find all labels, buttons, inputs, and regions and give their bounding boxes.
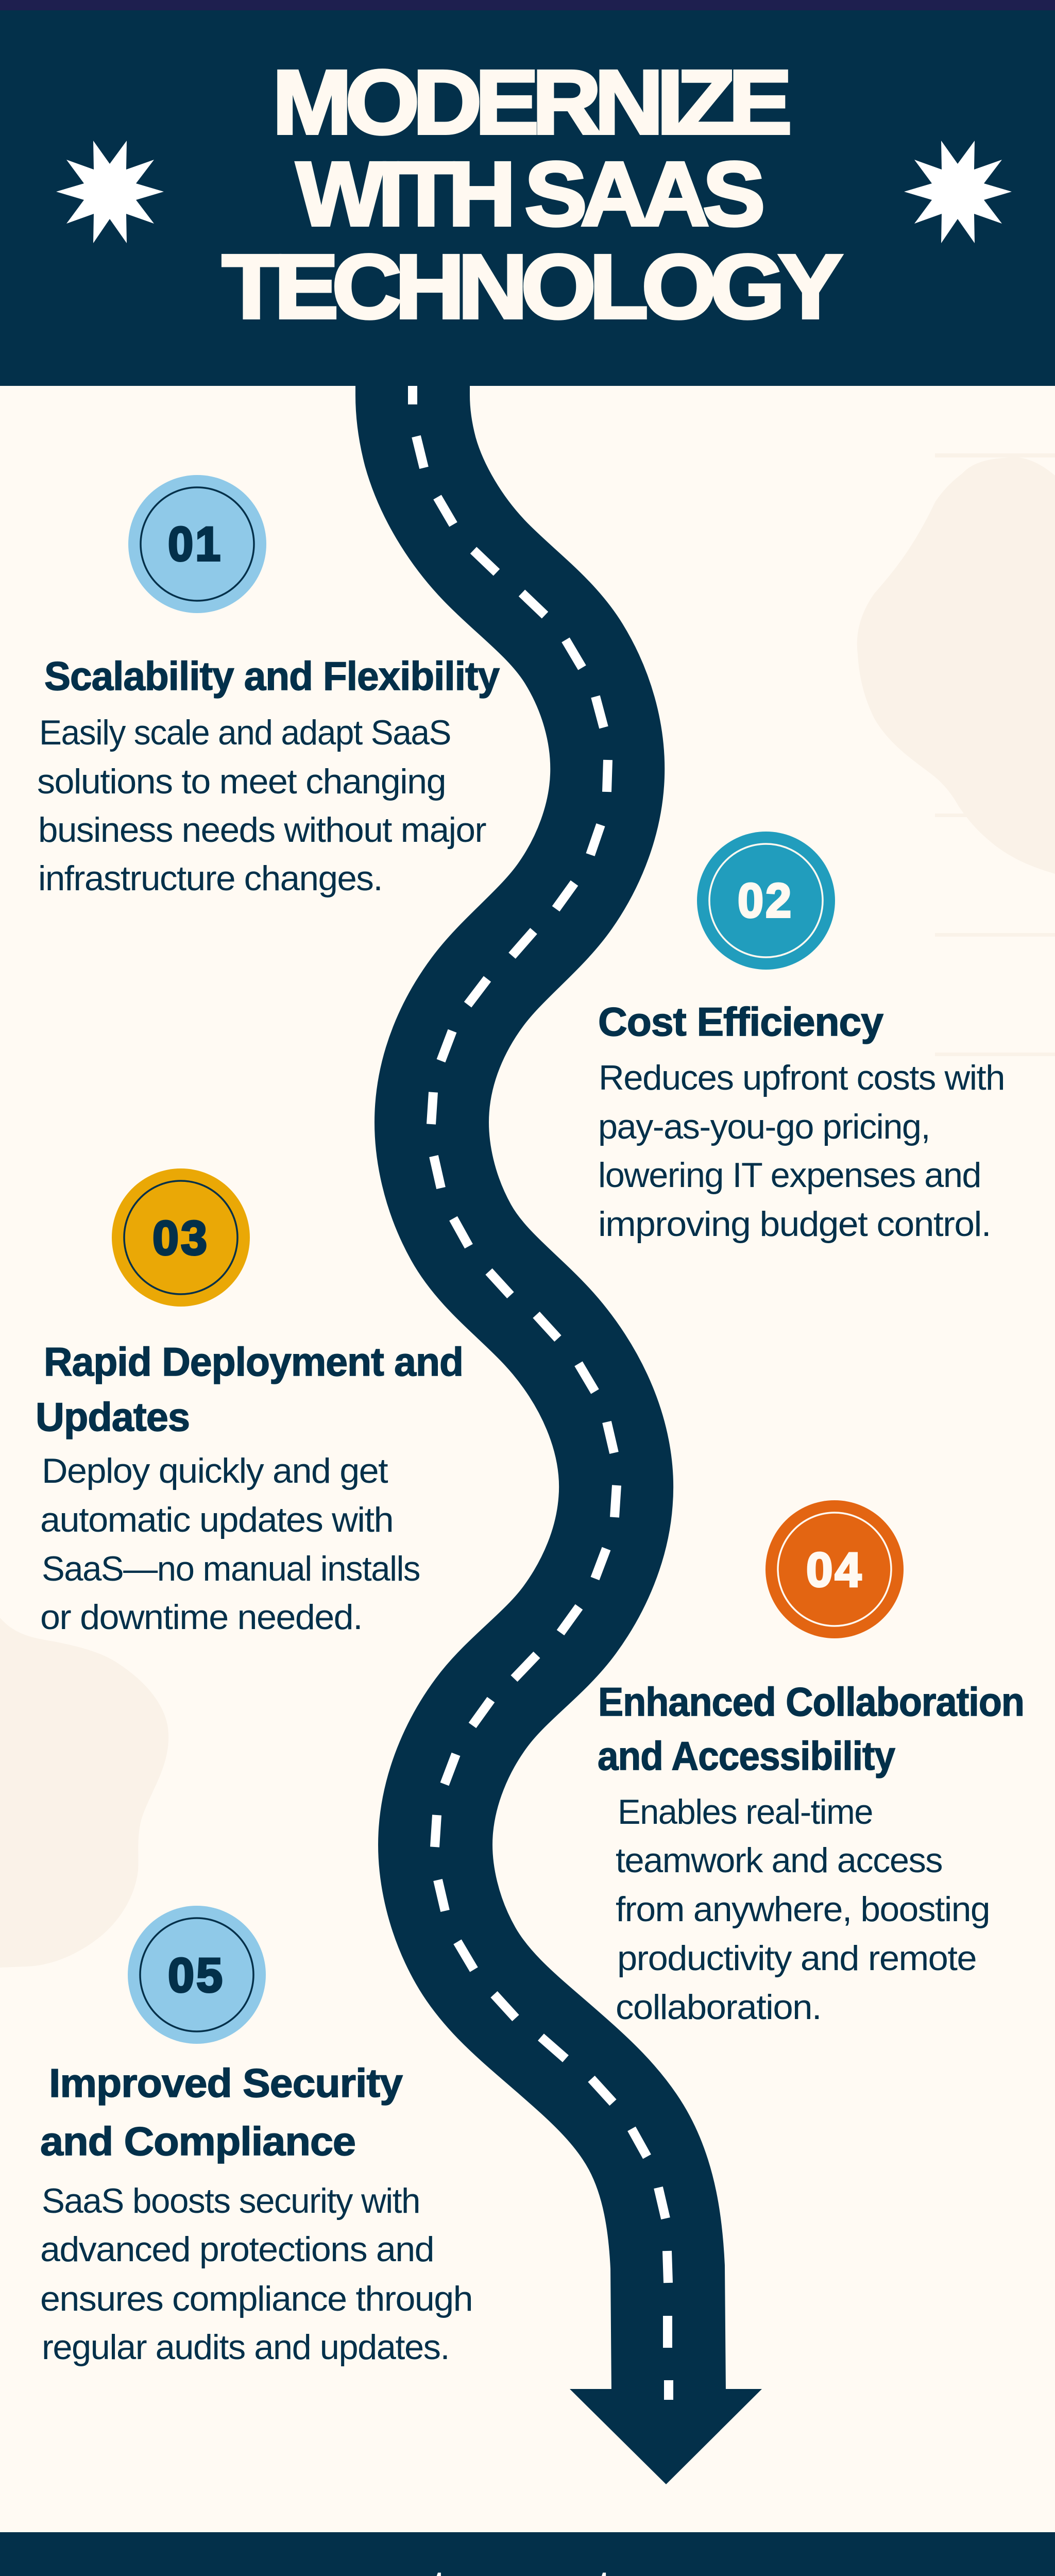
panel: 04 collaboration	[598, 1500, 1024, 2027]
heading 04: and Accessibility	[598, 1733, 895, 1778]
road arrowhead	[570, 2389, 762, 2484]
body text 03: automatic updates with	[40, 1500, 393, 1539]
title: TECHNOLOGY	[222, 236, 841, 337]
badge 04: 04	[806, 1543, 863, 1597]
title: WITH SAAS	[296, 144, 762, 245]
body text 04	[616, 1792, 990, 2027]
body text 02: improving budget control.	[598, 1205, 991, 1244]
body text 03: or downtime needed.	[40, 1598, 362, 1637]
heading 05	[40, 2060, 403, 2164]
body text 01: business needs without major	[38, 810, 486, 850]
body text 05: advanced protections and	[40, 2230, 434, 2269]
body text 02	[598, 1058, 1005, 1244]
heading 04	[598, 1679, 1024, 1778]
badge 05	[128, 1906, 266, 2044]
winding road	[413, 361, 669, 2393]
panel: 05 security	[40, 1906, 472, 2367]
heading 05: and Compliance	[40, 2119, 355, 2164]
badge 03	[112, 1168, 250, 1307]
icon: left star	[56, 141, 164, 243]
heading 03	[36, 1339, 463, 1439]
badge 04	[765, 1500, 904, 1638]
panel: 03 rapid deployment	[36, 1168, 463, 1637]
body text 01	[37, 713, 486, 898]
body text 04: collaboration.	[616, 1988, 821, 2027]
body text 01: infrastructure changes.	[38, 859, 382, 898]
title: MODERNIZE	[273, 52, 789, 153]
badge 03: 03	[152, 1211, 209, 1265]
body text 04: teamwork and access	[616, 1841, 942, 1880]
decorative blob: left	[0, 1618, 168, 1968]
heading 03: Updates	[36, 1394, 190, 1439]
heading 05: Improved Security	[49, 2060, 403, 2106]
heading 04: Enhanced Collaboration	[598, 1679, 1024, 1724]
body text 05: SaaS boosts security with	[42, 2181, 420, 2221]
badge 01	[128, 475, 266, 613]
body text 04: Enables real-time	[618, 1792, 873, 1832]
badge 02	[697, 832, 835, 970]
header band	[0, 0, 1055, 386]
heading 01: Scalability and Flexibility	[44, 653, 500, 699]
heading 03: Rapid Deployment and	[44, 1339, 463, 1384]
body text 03: SaaS—no manual installs	[42, 1549, 420, 1588]
body text 05	[40, 2181, 472, 2367]
body text 05: ensures compliance through	[40, 2279, 472, 2318]
badge 01: 01	[168, 517, 223, 571]
body text 01: Easily scale and adapt SaaS	[39, 713, 451, 752]
body text 02: lowering IT expenses and	[598, 1156, 981, 1195]
body text 02: Reduces upfront costs with	[599, 1058, 1005, 1097]
body text 04: productivity and remote	[617, 1939, 976, 1978]
footer band	[0, 2532, 1055, 2576]
body text 02: pay-as-you-go pricing,	[598, 1107, 930, 1146]
body text 04: from anywhere, boosting	[616, 1890, 990, 1929]
body text 03: Deploy quickly and get	[42, 1451, 388, 1490]
body text 03	[40, 1451, 420, 1637]
decorative blob: right	[857, 453, 1055, 1056]
panel: 02 cost efficiency	[598, 832, 1005, 1244]
title	[222, 52, 841, 337]
icon: right star	[904, 141, 1012, 243]
heading 02: Cost Efficiency	[598, 999, 883, 1044]
body text 01: solutions to meet changing	[37, 762, 446, 801]
body text 05: regular audits and updates.	[42, 2328, 449, 2367]
badge 05: 05	[168, 1948, 225, 2002]
road centre dashes	[413, 386, 669, 2400]
badge 02: 02	[738, 873, 793, 927]
panel: 01 scalability	[37, 475, 500, 898]
